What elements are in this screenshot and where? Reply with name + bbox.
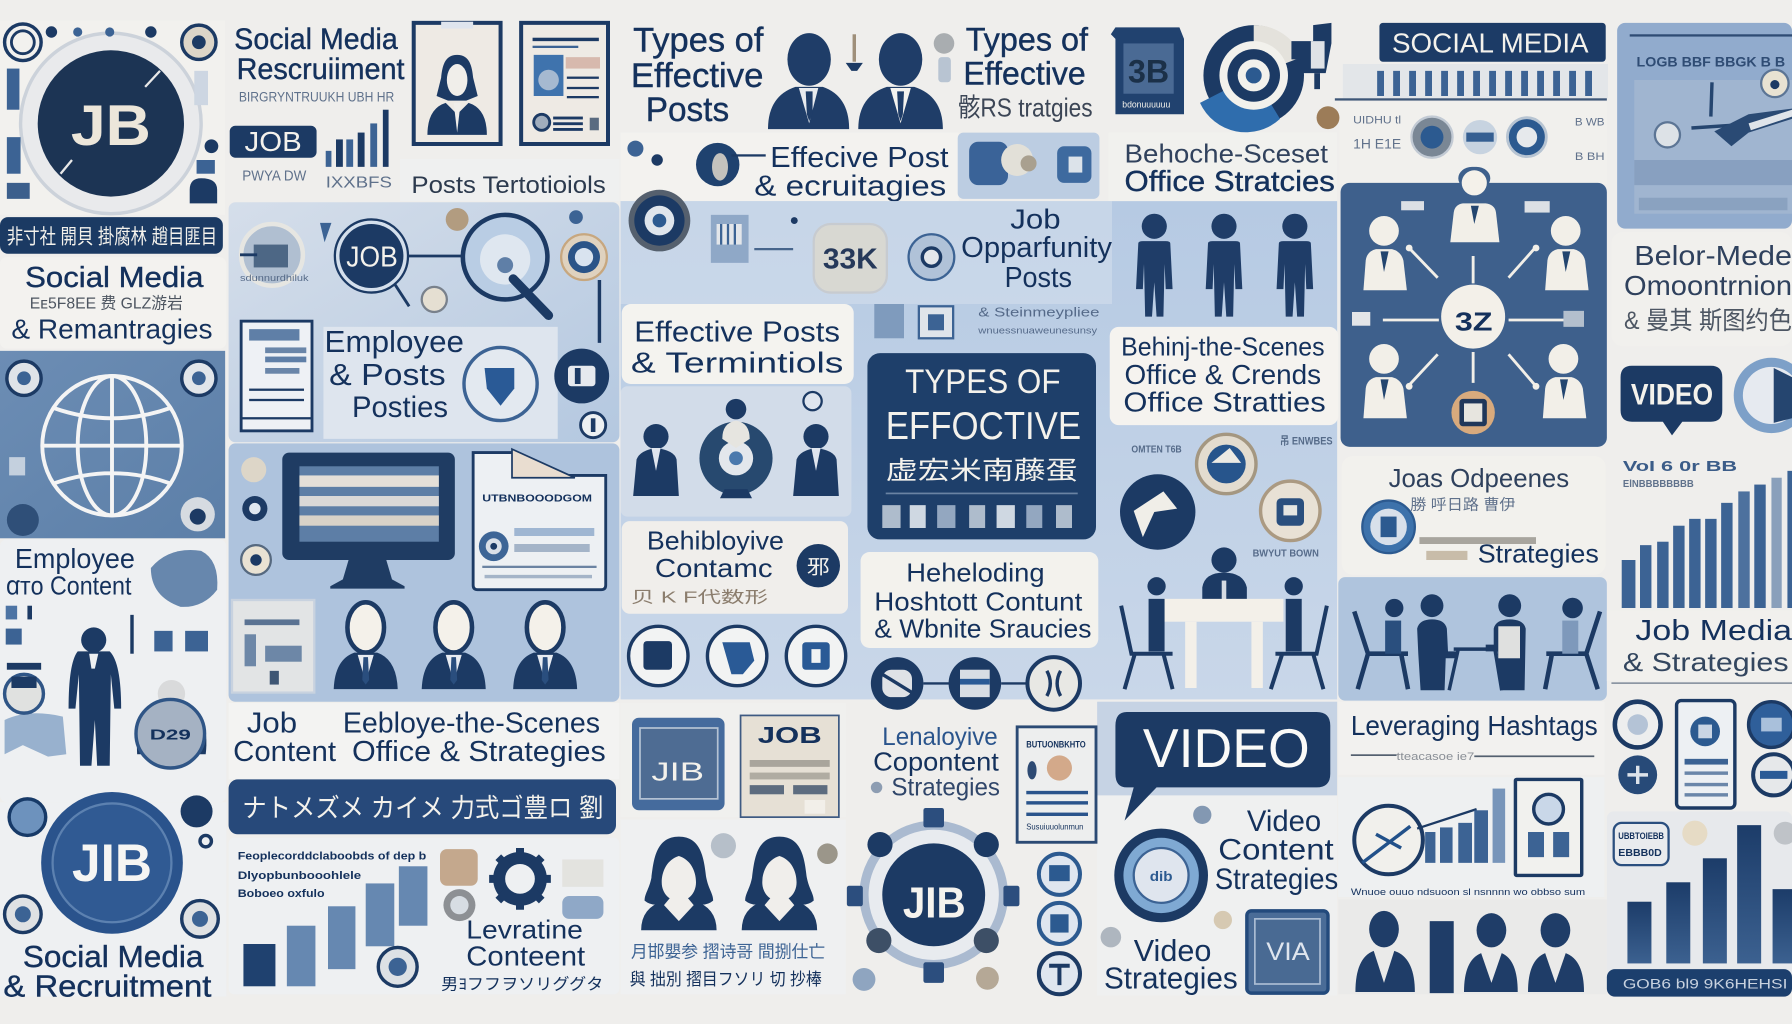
panel: central job opportunities	[621, 190, 1338, 710]
bubble: video	[1115, 712, 1330, 821]
text: job media strategies	[1607, 610, 1792, 684]
card: social icons	[958, 133, 1099, 199]
card: heheloding hashtag content	[861, 552, 1098, 648]
card: behibloyive content	[622, 521, 848, 614]
icon: clipboard with woman	[414, 22, 501, 144]
panel: bar chart and levratine content: Levratine	[466, 914, 583, 944]
icons: three connected buttons	[871, 657, 1080, 710]
bar chart: rising blue: VoI 6 0r BB	[1623, 459, 1738, 475]
text: video content strategies	[1215, 805, 1338, 896]
panel: bar chart and levratine content: Boboeo oxfulo	[238, 888, 325, 900]
text: posts tertotioiols	[400, 159, 619, 201]
panel: video speech	[1097, 702, 1338, 996]
icon row: metrics: UIDHU tl	[1353, 114, 1401, 126]
bar chart: dark panel: UBBTOIEBB	[1618, 831, 1664, 841]
panel: central job opportunities: & Steinmeypliee	[978, 306, 1099, 320]
text: video strategies	[1104, 933, 1238, 996]
panel: monitor and people	[229, 443, 619, 702]
icon: report document: BUTUONBKHTO	[1026, 739, 1086, 749]
panel: women icons: 月邯嬰参 摺诗哥 間捌仕亡	[631, 942, 825, 962]
heading: types of effective posts: Effective	[631, 57, 763, 95]
panel: women icons: 與 拙別 摺目フソリ 切 抄棒	[630, 969, 822, 989]
icon: report document	[1017, 727, 1096, 842]
panel: bar chart and levratine content	[229, 838, 619, 994]
card: jobs openings strategies: Joаs Odpeenes	[1389, 463, 1569, 493]
card: social media remantragies: Social Media	[25, 262, 204, 294]
text: employee posts: & Posts	[329, 357, 446, 392]
panel: JIB badge with recruitment caption	[0, 792, 226, 1004]
bubble: video small: VIDEO	[1631, 379, 1713, 412]
panel: JOB and JIB tiles	[621, 703, 846, 817]
panel: central job opportunities: wnuessnuaweunesunsy	[977, 326, 1098, 336]
card: behind the scenes: Office Stratties	[1123, 386, 1326, 417]
panel: job search network	[229, 202, 619, 442]
panel: types of effective dark: 虚宏米南藤蛋	[886, 457, 1078, 485]
caption bar	[1607, 969, 1792, 997]
pill: JOB: PWYA DW	[242, 169, 306, 185]
panel: employee content	[0, 539, 226, 802]
card: belor media	[1611, 232, 1792, 346]
card: behibloyive content: Contamc	[655, 553, 773, 583]
card: behibloyive content: 邪	[807, 557, 830, 579]
panel: central job opportunities: 吊 ENWBES	[1280, 435, 1333, 448]
card: jobs openings strategies: 勝 呼日路 曹伊	[1410, 497, 1516, 514]
text: job content: Job	[247, 708, 297, 740]
card: effective post recruitment	[621, 133, 959, 202]
heading: job opportunity posts: Job	[1010, 204, 1061, 235]
panel: navy team network	[1341, 167, 1607, 447]
heading: job opportunity posts	[961, 204, 1113, 294]
icon row: metrics	[1317, 102, 1607, 184]
icon row: metrics: B WB	[1575, 117, 1605, 129]
icon: 3B box: bdonuuuuuu	[1122, 99, 1170, 109]
card: effective posts: & Termintiols	[631, 348, 843, 380]
icon: folder file	[473, 449, 606, 590]
panel: JOB and JIB tiles: JOB	[758, 722, 822, 748]
text: video content strategies: Content	[1218, 833, 1335, 866]
panel: bar chart and levratine content: Feoplecorddclaboobds of dep b	[238, 850, 426, 862]
icon row: metrics: 1H E1E	[1353, 137, 1401, 152]
card: jobs openings strategies: Strategies	[1478, 538, 1599, 568]
icons: standing figures	[1136, 214, 1313, 317]
text: employee posts: Posties	[352, 391, 448, 424]
icon: VIA tile: VIA	[1266, 938, 1310, 966]
panel: JIB badge with recruitment caption: JIB	[72, 834, 152, 893]
bar chart: small growth	[326, 110, 392, 191]
text: job content: Content	[233, 736, 336, 768]
icon: JIB hub: JIB	[903, 880, 966, 928]
card: heheloding hashtag content: Hoshtott Contunt	[874, 586, 1083, 616]
text: lenaloyive content strategies	[871, 723, 1000, 801]
bar chart: small growth: IXXBFS	[326, 174, 392, 191]
banner: social media: SOCIAL MEDIA	[1392, 28, 1589, 59]
banner: japanese style dark bar	[229, 779, 616, 834]
text: video content strategies: Video	[1247, 805, 1321, 838]
text: employee posts	[323, 324, 558, 439]
icon: JIB hub	[847, 808, 1019, 991]
text: leveraging hashtags: Leveraging Hashtags	[1351, 710, 1598, 741]
panel: employee content: Employee	[15, 543, 135, 574]
bar chart: dark panel	[1607, 811, 1792, 997]
scene: meeting table	[1121, 547, 1327, 689]
icon: 3B box: 3B	[1128, 53, 1169, 89]
card: behind the scenes	[1110, 327, 1338, 425]
heading: types of effective posts: Posts	[646, 91, 729, 129]
panel: job search network: sdunnurdhiluk	[240, 273, 309, 283]
icon: two business people	[768, 33, 954, 129]
icons: team members	[1363, 203, 1589, 418]
panel: central job opportunities: OMTEN T6B	[1131, 445, 1182, 456]
card: social media remantragies: & Remantragies	[11, 313, 213, 344]
panel: bar chart and levratine content: 男ﾖフフヲソリググタ	[441, 976, 603, 994]
panel: job search network: JOB	[346, 241, 398, 273]
icon: gear	[489, 848, 551, 910]
panel: JB badge	[0, 21, 225, 215]
bar chart: dark panel: EBBB0D	[1618, 848, 1662, 859]
text: job media strategies: & Strategies	[1623, 647, 1789, 677]
icons: three ring buttons	[629, 626, 846, 686]
icon: signpost tool	[1291, 23, 1331, 89]
bubble: video: VIDEO	[1143, 717, 1310, 779]
heading: types of effective posts: Types of	[633, 21, 764, 59]
icon: standing businessman	[69, 627, 121, 766]
panel: women icons	[621, 819, 846, 994]
heading: social media recruitment: Social Media	[234, 23, 398, 56]
banner: left dark bar: 非寸社 開貝 掛腐林 趙目匪目	[7, 225, 217, 248]
text: leveraging hashtags	[1338, 702, 1605, 775]
card: social media remantragies: Eᴇ5F8EE 费 GLZ游岩	[30, 295, 183, 313]
heading: types of effective strategies: Types of	[966, 21, 1088, 57]
icon: report document: Susuiuuolunmun	[1026, 823, 1083, 832]
icon: second person with badge: D29	[150, 727, 191, 743]
heading: social media recruitment	[234, 23, 405, 105]
panel: screenshot monitor: LOGB BBF BBGK B B	[1637, 54, 1785, 69]
text: job content	[229, 703, 619, 779]
panel: JIB badge with recruitment caption: & Recruitment	[3, 969, 212, 1004]
icon row: metrics: B BH	[1575, 151, 1605, 163]
heading: social media recruitment: Rescruiiment	[237, 53, 405, 86]
card: social media remantragies	[0, 257, 226, 349]
panel: globe	[0, 351, 225, 538]
icons: circle badges	[1120, 434, 1320, 550]
panel: JIB badge with recruitment caption: Social Media	[23, 939, 204, 974]
bar chart: rising blue: ElNBBBBBBBB	[1623, 479, 1694, 490]
image card	[232, 600, 314, 693]
icon: target	[1200, 25, 1304, 132]
pill: JOB: JOB	[245, 126, 302, 157]
card: behind the scenes office strategies: Office Stratcies	[1125, 166, 1335, 198]
panel: hashtag growth chart: Wnuoe ouuo ndsuoon sl nsnnnn wo obbso sum	[1351, 887, 1585, 897]
panel: types of effective dark: EFFOCTIVE	[886, 405, 1081, 448]
pill: JOB	[230, 126, 317, 185]
bar chart	[243, 866, 427, 986]
card: heheloding hashtag content: & Wbnite Sraucies	[874, 614, 1091, 644]
text: lenaloyive content strategies: Copontent	[873, 746, 1000, 776]
icon: folder file: UTBNBOOODGOM	[482, 494, 592, 505]
icon: 3B box	[1111, 27, 1184, 114]
panel: central job opportunities: BWYUT BOWN	[1253, 549, 1319, 560]
text: video strategies: Strategies	[1104, 961, 1238, 996]
icons: right hub buttons	[1039, 854, 1080, 994]
card: effective posts: Effective Posts	[634, 317, 840, 349]
panel: hashtag growth chart	[1338, 777, 1605, 897]
panel: navy team network: 3Z	[1455, 306, 1493, 336]
text: job media strategies: Job Media	[1635, 615, 1792, 647]
card: behind the scenes: Office & Crends	[1125, 359, 1321, 390]
icons: tablet and round buttons	[1615, 701, 1792, 808]
banner: social media	[1379, 23, 1606, 62]
panel: types of effective dark: TYPES OF	[905, 363, 1061, 401]
text: lenaloyive content strategies: Lenaloyive	[882, 723, 998, 751]
card: behind the scenes office strategies: Behoche-Sceset	[1125, 138, 1329, 168]
icons: bottom business people	[1338, 899, 1607, 994]
text: employee posts: Employee	[325, 324, 464, 359]
heading: types of effective strategies	[958, 21, 1093, 123]
panel: screenshot monitor	[1617, 23, 1792, 229]
icon: form document	[241, 321, 312, 431]
heading: job opportunity posts: Posts	[1005, 262, 1072, 294]
panel: video speech: dib	[1150, 869, 1173, 884]
scene: seated people meeting	[1338, 577, 1607, 701]
panel: three person network	[621, 386, 851, 517]
bubble: video small	[1621, 366, 1722, 435]
icon: gear badge	[629, 190, 690, 251]
panel: bar chart and levratine content: Conteent	[466, 941, 586, 972]
card: effective post recruitment: & ecruitagies	[754, 170, 946, 202]
heading: social media recruitment: BIRGRYNTRUUKH UBH HR	[239, 90, 394, 105]
card: behibloyive content: 贝 K F代数形	[631, 588, 768, 606]
people row	[334, 602, 398, 689]
panel: JB badge: JB	[71, 94, 151, 158]
illustration: blue globe blob	[151, 550, 217, 607]
text: job content: Office & Strategies	[352, 736, 606, 768]
badge: 33K: 33K	[823, 244, 878, 276]
text: video strategies: Video	[1134, 933, 1211, 968]
icon: clock	[1734, 358, 1792, 433]
icon: clipboard with profile	[521, 23, 608, 144]
heading: types of effective strategies: Effective	[963, 56, 1086, 92]
text: job content: Eebloye-the-Scenes	[343, 708, 600, 740]
caption bar: GOB6 bl9 9K6HEHSI	[1623, 977, 1787, 992]
card: jobs openings strategies	[1342, 456, 1606, 575]
heading: types of effective strategies: 骸RS tratgies	[958, 93, 1093, 123]
card: behind the scenes office strategies	[1109, 133, 1337, 201]
text: leveraging hashtags: tteacasoe ie7	[1397, 751, 1474, 763]
text: posts tertotioiols: Posts Tertotioiols	[411, 172, 606, 199]
card: effective post recruitment: Effecive Post	[770, 142, 949, 174]
card: belor media: Belor-Mede	[1634, 240, 1792, 271]
card: heheloding hashtag content: Heheloding	[906, 558, 1045, 588]
card: belor media: Omoontrnion	[1624, 270, 1792, 301]
heading: types of effective posts	[631, 21, 764, 129]
panel: types of effective dark	[867, 353, 1096, 539]
card: behibloyive content: Behibloyive	[647, 526, 784, 556]
bar chart: rising blue	[1622, 459, 1792, 608]
banner: japanese style dark bar: ナトメズメ カイメ 力式ゴ豊ロ 劉	[242, 793, 603, 823]
panel: bar chart and levratine content: Dlyopbunbooohlele	[238, 870, 361, 882]
text: video content strategies: Strategies	[1215, 863, 1338, 896]
icon: VIA tile	[1247, 911, 1328, 993]
panel: employee content: ꭤᴛᴏ Content	[6, 570, 132, 600]
heading: job opportunity posts: Opparfunity	[961, 232, 1113, 264]
card: effective posts	[622, 304, 854, 384]
striped timeline band	[1335, 64, 1608, 101]
banner: left dark bar	[0, 217, 223, 254]
text: lenaloyive content strategies: Strategies	[891, 773, 1000, 801]
panel: JOB and JIB tiles: JIB	[651, 757, 704, 787]
badge: 33K	[814, 224, 887, 293]
icon: second person with badge	[136, 680, 206, 768]
card: behind the scenes: Behinj-the-Scenes	[1121, 331, 1325, 361]
icon: desktop monitor	[282, 453, 455, 589]
